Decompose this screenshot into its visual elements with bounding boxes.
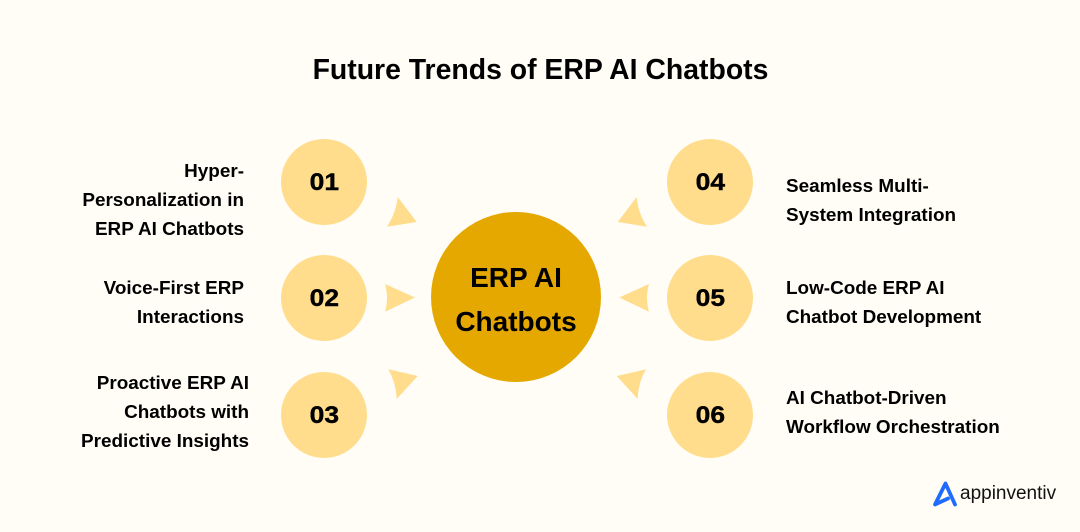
text: trend 01 bbox=[82, 161, 244, 240]
arrow: middle right bbox=[619, 284, 649, 312]
icon: logo mark bbox=[933, 482, 957, 506]
badge 04 bbox=[667, 139, 753, 225]
text: trend 01: Personalization in bbox=[82, 190, 244, 211]
badge 05: 05 bbox=[695, 285, 725, 312]
arrow: top right bbox=[618, 197, 647, 227]
badge 04: 04 bbox=[695, 169, 725, 196]
text: trend 03: Proactive ERP AI bbox=[97, 373, 249, 394]
text: trend 06: Workflow Orchestration bbox=[786, 417, 1000, 438]
arrow: bottom left bbox=[388, 369, 418, 399]
text: trend 05 bbox=[786, 278, 981, 328]
text: trend 03: Predictive Insights bbox=[81, 431, 249, 452]
text: trend 02 bbox=[104, 278, 244, 328]
text: trend 04: System Integration bbox=[786, 205, 956, 226]
text: trend 06 bbox=[786, 388, 1000, 438]
badge 01 bbox=[281, 139, 367, 225]
central circle bbox=[431, 212, 601, 382]
text: trend 03: Chatbots with bbox=[124, 402, 249, 423]
badge 03: 03 bbox=[309, 402, 339, 429]
badge 01: 01 bbox=[309, 169, 339, 196]
text: trend 05: Low-Code ERP AI bbox=[786, 278, 944, 299]
central circle: ERP AI bbox=[470, 262, 562, 293]
badge 06: 06 bbox=[695, 402, 725, 429]
text: trend 05: Chatbot Development bbox=[786, 307, 981, 328]
text: trend 01: Hyper- bbox=[184, 161, 244, 182]
text: trend 01: ERP AI Chatbots bbox=[95, 219, 244, 240]
badge 02 bbox=[281, 255, 367, 341]
text: trend 02: Interactions bbox=[137, 307, 244, 328]
central circle: Chatbots bbox=[455, 306, 577, 337]
title: Future Trends of ERP AI Chatbots bbox=[313, 54, 768, 86]
arrow: bottom right bbox=[617, 369, 646, 399]
text: trend 02: Voice-First ERP bbox=[104, 278, 244, 299]
text: trend 06: AI Chatbot-Driven bbox=[786, 388, 947, 409]
text: trend 03 bbox=[81, 373, 249, 452]
arrow: top left bbox=[387, 197, 417, 227]
text: trend 04: Seamless Multi- bbox=[786, 176, 929, 197]
badge 06 bbox=[667, 372, 753, 458]
arrow: middle left bbox=[385, 284, 415, 312]
text: trend 04 bbox=[786, 176, 956, 226]
badge 03 bbox=[281, 372, 367, 458]
logo wordmark: appinventiv bbox=[960, 483, 1056, 504]
badge 02: 02 bbox=[309, 285, 339, 312]
logo: appinventiv bbox=[933, 482, 1056, 506]
badge 05 bbox=[667, 255, 753, 341]
